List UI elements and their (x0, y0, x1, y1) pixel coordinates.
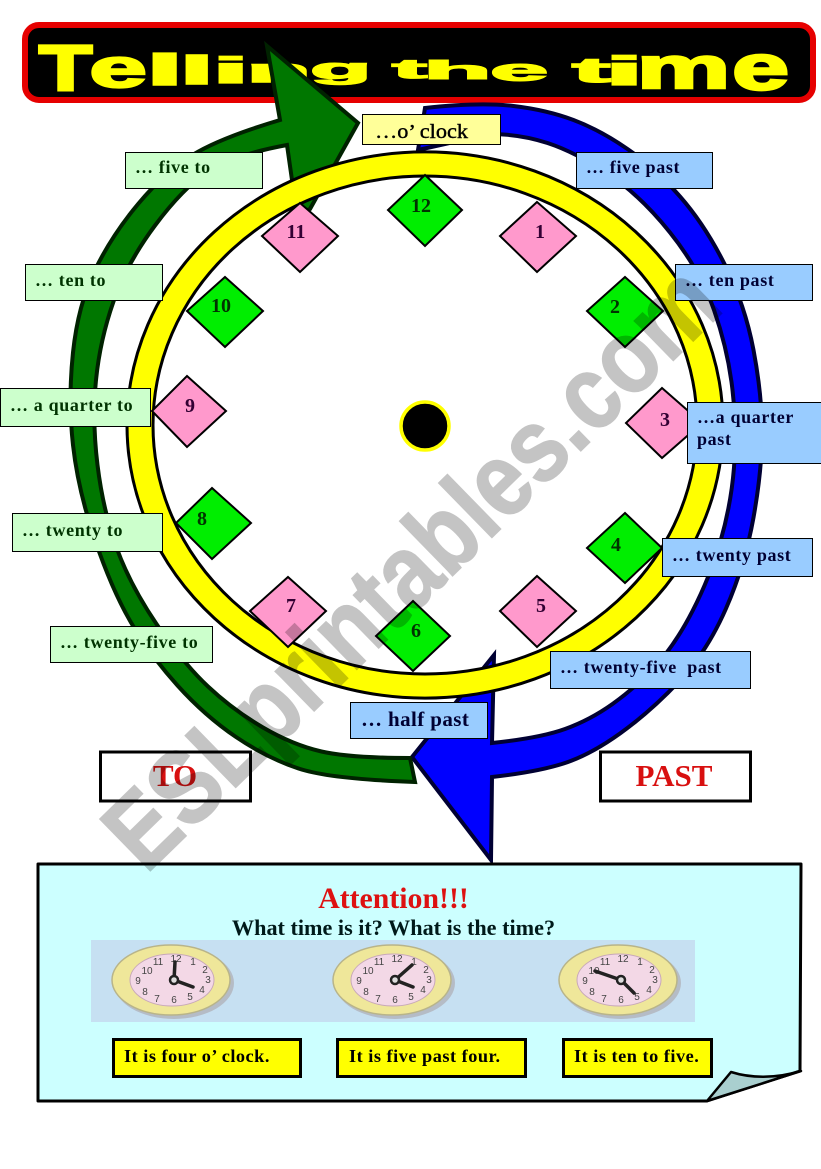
clock 3: 3 (652, 975, 658, 986)
clock 1: 2 (202, 965, 208, 976)
title text: i (211, 49, 250, 91)
title text: t (392, 54, 427, 84)
clock 2: 3 (426, 975, 432, 986)
clock 3 (559, 945, 681, 1019)
number 9: 9 (185, 395, 195, 417)
clock 2: 7 (375, 994, 381, 1005)
label: twenty-five to: … twenty-five to (60, 632, 198, 652)
number 2 (587, 277, 663, 347)
label: twenty to: … twenty to (22, 520, 123, 540)
clock 2: 8 (363, 987, 369, 998)
title text: t (572, 51, 610, 89)
number 1: 1 (535, 221, 545, 243)
clock 2: 9 (356, 976, 362, 987)
clock 2: 6 (392, 995, 398, 1006)
label: five to (126, 152, 262, 188)
title text: l (179, 48, 215, 93)
clock picture strip (91, 940, 695, 1022)
PAST box (600, 752, 750, 801)
label: ten to: … ten to (35, 270, 106, 290)
clock 1: 12 (170, 954, 182, 965)
number 3 (626, 388, 702, 458)
title text: e (732, 32, 789, 104)
label: half past (350, 702, 488, 738)
clock 1: 5 (187, 992, 193, 1003)
caption 3: It is ten to five. (574, 1046, 699, 1066)
question: What time is it? What is the time? (232, 915, 555, 940)
clock 1: 1 (190, 957, 196, 968)
title text: T (39, 33, 92, 104)
label: ten past (676, 264, 812, 300)
label: a quarter past (688, 402, 821, 464)
caption 2 (338, 1040, 526, 1076)
number 11: 11 (287, 221, 305, 243)
clock 2: 12 (391, 954, 403, 965)
title text: g (310, 52, 371, 85)
number 12: 12 (411, 195, 431, 217)
label: five to: … five to (135, 157, 211, 177)
clock 3: 5 (634, 992, 640, 1003)
label: twenty past: … twenty past (672, 545, 791, 565)
title text (39, 32, 789, 104)
clock 3: 9 (582, 976, 588, 987)
blue arrow: past (412, 104, 762, 860)
title text: e (490, 53, 548, 87)
label: twenty-five past: … twenty-five past (560, 657, 722, 677)
number 4 (587, 513, 662, 583)
caption 1: It is four o’ clock. (124, 1046, 270, 1066)
heading: Attention!!! (318, 882, 469, 915)
clock 2 (333, 945, 455, 1019)
number 1 (500, 202, 576, 272)
number 5: 5 (536, 595, 546, 617)
label: twenty past (662, 538, 812, 576)
caption 1 (114, 1040, 300, 1076)
TO box (100, 752, 250, 801)
TO box: TO (153, 758, 197, 793)
clock 2: 10 (362, 966, 374, 977)
clock 2: 4 (420, 985, 426, 996)
label: twenty to (12, 514, 162, 552)
title text: l (145, 46, 184, 95)
number 11 (262, 203, 338, 272)
clock 3: 11 (600, 957, 611, 968)
title banner (25, 25, 813, 104)
clock 3: 10 (588, 966, 600, 977)
number 7: 7 (286, 595, 296, 617)
label: o'clock: …o’ clock (375, 121, 468, 143)
caption 2: It is five past four. (349, 1046, 501, 1066)
title text: m (637, 35, 730, 100)
number 6 (376, 601, 450, 671)
title text: h (423, 56, 492, 85)
title text: n (247, 53, 311, 89)
clock numbers (152, 175, 702, 671)
clock 3: 2 (649, 965, 655, 976)
clock 3: 12 (617, 954, 629, 965)
clock 1: 10 (141, 966, 153, 977)
label: a quarter past: …a quarter (697, 407, 794, 427)
label: five past (576, 152, 712, 188)
clock 2: 11 (374, 957, 385, 968)
attention panel (38, 864, 801, 1101)
label: a quarter past: past (697, 429, 732, 449)
number 5 (500, 576, 576, 647)
caption 3 (564, 1040, 712, 1076)
yellow clock ring (127, 152, 723, 698)
number 10 (187, 277, 263, 347)
title text: e (90, 38, 147, 99)
green arrow: to (70, 46, 415, 782)
label: twenty-five to (50, 626, 212, 662)
clock 3: 1 (637, 957, 643, 968)
clock centre (401, 402, 449, 450)
label: a quarter to (0, 388, 150, 426)
label: o'clock (362, 114, 500, 144)
label: half past: … half past (361, 707, 469, 731)
label: ten to (26, 264, 162, 300)
number 12 (388, 175, 462, 246)
clock 1: 7 (154, 994, 160, 1005)
number 8 (176, 488, 251, 559)
watermark: ESLprintables.com (80, 242, 742, 891)
number 9 (152, 376, 226, 447)
label: ten past: … ten past (685, 270, 775, 290)
clock 3: 4 (646, 985, 652, 996)
clock 3: 6 (618, 995, 624, 1006)
clock 1: 9 (135, 976, 141, 987)
clock 1: 11 (153, 957, 164, 968)
clock 2: 2 (423, 965, 429, 976)
number 4: 4 (611, 534, 621, 556)
number 8: 8 (197, 508, 207, 530)
clock 2: 1 (411, 957, 417, 968)
clock 3: 8 (589, 987, 595, 998)
number 10: 10 (211, 295, 231, 317)
number 3: 3 (660, 409, 670, 431)
label: a quarter to: … a quarter to (10, 395, 133, 415)
number 2: 2 (610, 296, 620, 318)
clock 1: 8 (142, 987, 148, 998)
PAST box: PAST (636, 758, 713, 793)
number 6: 6 (411, 620, 421, 642)
page curl (707, 1071, 801, 1101)
clock 2: 5 (408, 992, 414, 1003)
clock 1 (112, 945, 234, 1019)
clock 1: 3 (205, 975, 211, 986)
clock 1: 4 (199, 985, 205, 996)
label: five past: … five past (586, 157, 680, 177)
number 7 (250, 577, 326, 647)
label: twenty-five past (550, 652, 750, 688)
title text: i (604, 48, 645, 94)
clock 3: 7 (601, 994, 607, 1005)
clock 1: 6 (171, 995, 177, 1006)
